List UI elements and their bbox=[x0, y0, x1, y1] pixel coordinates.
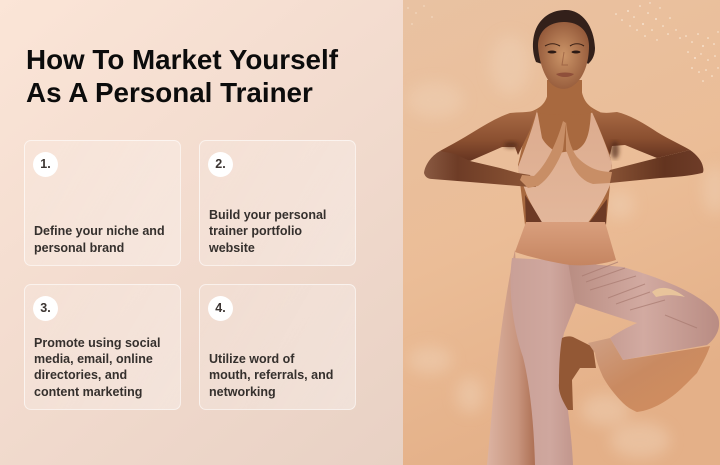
number badge 2 bbox=[208, 152, 233, 177]
title: How To Market Yourself bbox=[26, 44, 338, 75]
number badge 3 bbox=[33, 296, 58, 321]
card 4: word of mouth bbox=[199, 284, 356, 410]
number badge 3: 3. bbox=[40, 301, 51, 315]
left upper arm bbox=[440, 110, 537, 161]
flared trouser cuff bbox=[588, 338, 710, 412]
hair bbox=[533, 10, 595, 64]
number badge 4 bbox=[208, 296, 233, 321]
photo: woman in yoga tree pose bbox=[403, 0, 720, 465]
card 1 text bbox=[34, 224, 165, 255]
armpit shadows bbox=[504, 141, 619, 159]
praying hands bbox=[520, 121, 612, 188]
raised foot bbox=[559, 336, 596, 410]
face bbox=[538, 22, 589, 89]
card 3 text bbox=[34, 336, 160, 399]
thigh folds bbox=[582, 262, 697, 328]
right upper arm bbox=[591, 109, 690, 158]
number badge 1 bbox=[33, 152, 58, 177]
card 2 text: website bbox=[209, 241, 255, 255]
card 3 text: Promote using social bbox=[34, 336, 160, 350]
bent thigh bbox=[568, 262, 719, 360]
card 3 text: media, email, online bbox=[34, 352, 153, 366]
card 3 text: directories, and bbox=[34, 368, 127, 382]
card 2: portfolio website bbox=[199, 140, 356, 266]
eyebrows, eyes and mouth bbox=[545, 44, 584, 77]
card 4 text: Utilize word of bbox=[209, 352, 294, 366]
card 1: define niche bbox=[24, 140, 181, 266]
waist sash bbox=[515, 222, 616, 265]
card 3 text: content marketing bbox=[34, 385, 142, 399]
card 4 text bbox=[209, 352, 333, 399]
drape fabric bbox=[487, 250, 538, 465]
card 3: promotion bbox=[24, 284, 181, 410]
torso skin bbox=[518, 85, 612, 225]
card 4 text: mouth, referrals, and bbox=[209, 368, 333, 382]
number badge 1: 1. bbox=[40, 157, 51, 171]
white speckles top right bbox=[407, 2, 719, 82]
card 4 text: networking bbox=[209, 385, 276, 399]
corset cutouts bbox=[525, 195, 607, 224]
card 1 text: Define your niche and bbox=[34, 224, 165, 238]
number badge 2: 2. bbox=[215, 157, 226, 171]
title: As A Personal Trainer bbox=[26, 77, 313, 108]
right forearm bbox=[606, 150, 703, 183]
card 2 text bbox=[209, 208, 326, 255]
wall backdrop bbox=[403, 0, 720, 465]
card 1 text: personal brand bbox=[34, 241, 124, 255]
neck bbox=[536, 80, 594, 115]
left forearm bbox=[424, 151, 536, 187]
left panel background bbox=[0, 0, 403, 465]
title bbox=[26, 44, 338, 108]
card 2 text: Build your personal bbox=[209, 208, 326, 222]
number badge 4: 4. bbox=[215, 301, 226, 315]
bodysuit top bbox=[518, 110, 612, 224]
gold leaf print on thigh bbox=[652, 288, 685, 297]
card 2 text: trainer portfolio bbox=[209, 224, 302, 238]
standing leg bbox=[510, 258, 590, 465]
